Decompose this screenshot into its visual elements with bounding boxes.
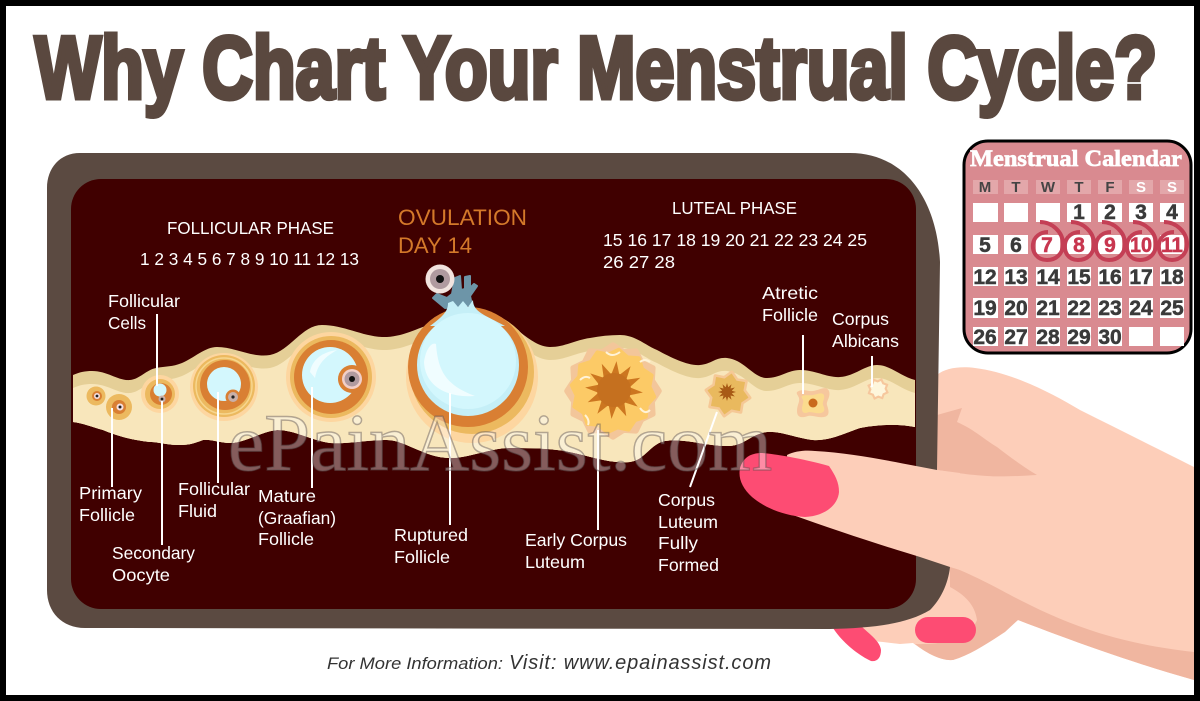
leader lines xyxy=(112,314,872,545)
corpus luteum fully formed xyxy=(703,369,753,419)
follicle labels: Cells xyxy=(108,313,146,333)
date numbers: 4 xyxy=(1166,201,1178,224)
follicle labels: Follicular xyxy=(108,291,180,311)
corpus albicans xyxy=(865,376,891,402)
secondary follicle xyxy=(141,375,179,413)
date numbers: 23 xyxy=(1098,297,1122,320)
follicle labels: Follicle xyxy=(79,505,135,525)
phase headings and day numbers: 1 2 3 4 5 6 7 8 9 10 11 12 13 xyxy=(140,249,359,269)
hand: pointing finger over the screen xyxy=(787,451,960,570)
date numbers: 6 xyxy=(1010,234,1022,257)
red circles around period days xyxy=(1033,222,1187,260)
follicle labels: (Graafian) xyxy=(258,508,336,528)
ruptured follicle with released egg xyxy=(406,264,538,443)
calendar title: Menstrual Calendar xyxy=(970,146,1182,171)
phase headings and day numbers: FOLLICULAR PHASE xyxy=(167,218,334,238)
hand: back of hand and lower fingers behind the device xyxy=(830,367,1194,680)
date numbers: 19 xyxy=(973,297,997,320)
weekday header: S xyxy=(1167,179,1177,196)
date numbers: 17 xyxy=(1129,266,1153,289)
follicle labels: Luteum xyxy=(658,512,718,532)
phase headings and day numbers: 26 27 28 xyxy=(603,252,675,272)
mature graafian follicle xyxy=(286,332,376,422)
phase headings and day numbers: DAY 14 xyxy=(398,233,472,258)
early corpus luteum xyxy=(566,344,660,438)
weekday header: T xyxy=(1011,179,1021,196)
atretic follicle xyxy=(797,388,829,417)
phone screen xyxy=(71,179,916,609)
date numbers: 2 xyxy=(1104,201,1116,224)
follicle labels xyxy=(79,283,899,585)
date numbers: 29 xyxy=(1067,326,1091,349)
follicle labels: Atretic xyxy=(762,283,818,303)
phone device frame xyxy=(47,153,950,629)
follicle labels: Follicle xyxy=(394,547,450,567)
follicle labels: Fully xyxy=(658,533,698,553)
date numbers: 8 xyxy=(1073,234,1085,257)
ovary tissue band xyxy=(73,325,915,462)
follicle labels: Corpus xyxy=(658,490,715,510)
follicle labels: Primary xyxy=(79,483,142,503)
weekday header: S xyxy=(1136,179,1146,196)
follicle with follicular fluid xyxy=(190,353,258,421)
follicle labels: Albicans xyxy=(832,331,899,351)
date numbers: 30 xyxy=(1098,326,1122,349)
follicle labels: Luteum xyxy=(525,552,585,572)
date numbers: 28 xyxy=(1036,326,1060,349)
date cells xyxy=(973,203,1184,346)
menstrual calendar xyxy=(964,141,1191,353)
phase headings and day numbers: OVULATION xyxy=(398,205,527,230)
follicle labels: Follicle xyxy=(258,529,314,549)
date numbers: 7 xyxy=(1041,234,1053,257)
weekday header: W xyxy=(1041,179,1056,196)
phase headings and day numbers xyxy=(140,198,867,272)
date numbers: 20 xyxy=(1004,297,1028,320)
follicle labels: Secondary xyxy=(112,543,195,563)
follicle labels: Follicular xyxy=(178,479,250,499)
date numbers: 27 xyxy=(1004,326,1028,349)
weekday header: F xyxy=(1105,179,1115,196)
fingernail xyxy=(740,453,839,517)
follicle labels: Ruptured xyxy=(394,525,468,545)
date numbers: 18 xyxy=(1160,266,1184,289)
follicle labels: Follicle xyxy=(762,305,818,325)
footer: more information: Visit: www.epainassist.com xyxy=(509,652,771,674)
date numbers: 15 xyxy=(1067,266,1091,289)
follicle labels: Formed xyxy=(658,555,719,575)
follicle labels: Mature xyxy=(258,486,316,506)
date numbers: 13 xyxy=(1004,266,1028,289)
weekday header xyxy=(973,179,1184,196)
weekday header: M xyxy=(979,179,991,196)
follicle labels: Fluid xyxy=(178,501,217,521)
follicle labels: Early Corpus xyxy=(525,530,627,550)
date numbers: 3 xyxy=(1135,201,1147,224)
follicle labels: Corpus xyxy=(832,309,889,329)
date numbers: 14 xyxy=(1036,266,1060,289)
date numbers: 11 xyxy=(1161,234,1183,257)
phase headings and day numbers: LUTEAL PHASE xyxy=(672,198,797,218)
watermark: ePainAssist.com xyxy=(228,397,772,488)
date numbers: 12 xyxy=(973,266,997,289)
date numbers: 5 xyxy=(979,234,991,257)
date numbers: 1 xyxy=(1073,201,1085,224)
date numbers: 24 xyxy=(1129,297,1153,320)
follicle labels: Oocyte xyxy=(112,565,170,585)
footer: more information: For More Information: xyxy=(327,654,503,673)
date numbers: 21 xyxy=(1036,297,1060,320)
date numbers: 9 xyxy=(1104,234,1116,257)
weekday header: T xyxy=(1074,179,1084,196)
date numbers: 22 xyxy=(1067,297,1091,320)
footer: more information xyxy=(327,652,771,674)
primary follicles xyxy=(86,386,132,420)
date numbers xyxy=(973,201,1184,349)
date numbers: 10 xyxy=(1130,234,1152,257)
date numbers: 16 xyxy=(1098,266,1122,289)
date numbers: 25 xyxy=(1160,297,1184,320)
date numbers: 26 xyxy=(973,326,997,349)
phase headings and day numbers: 15 16 17 18 19 20 21 22 23 24 25 xyxy=(603,230,867,250)
